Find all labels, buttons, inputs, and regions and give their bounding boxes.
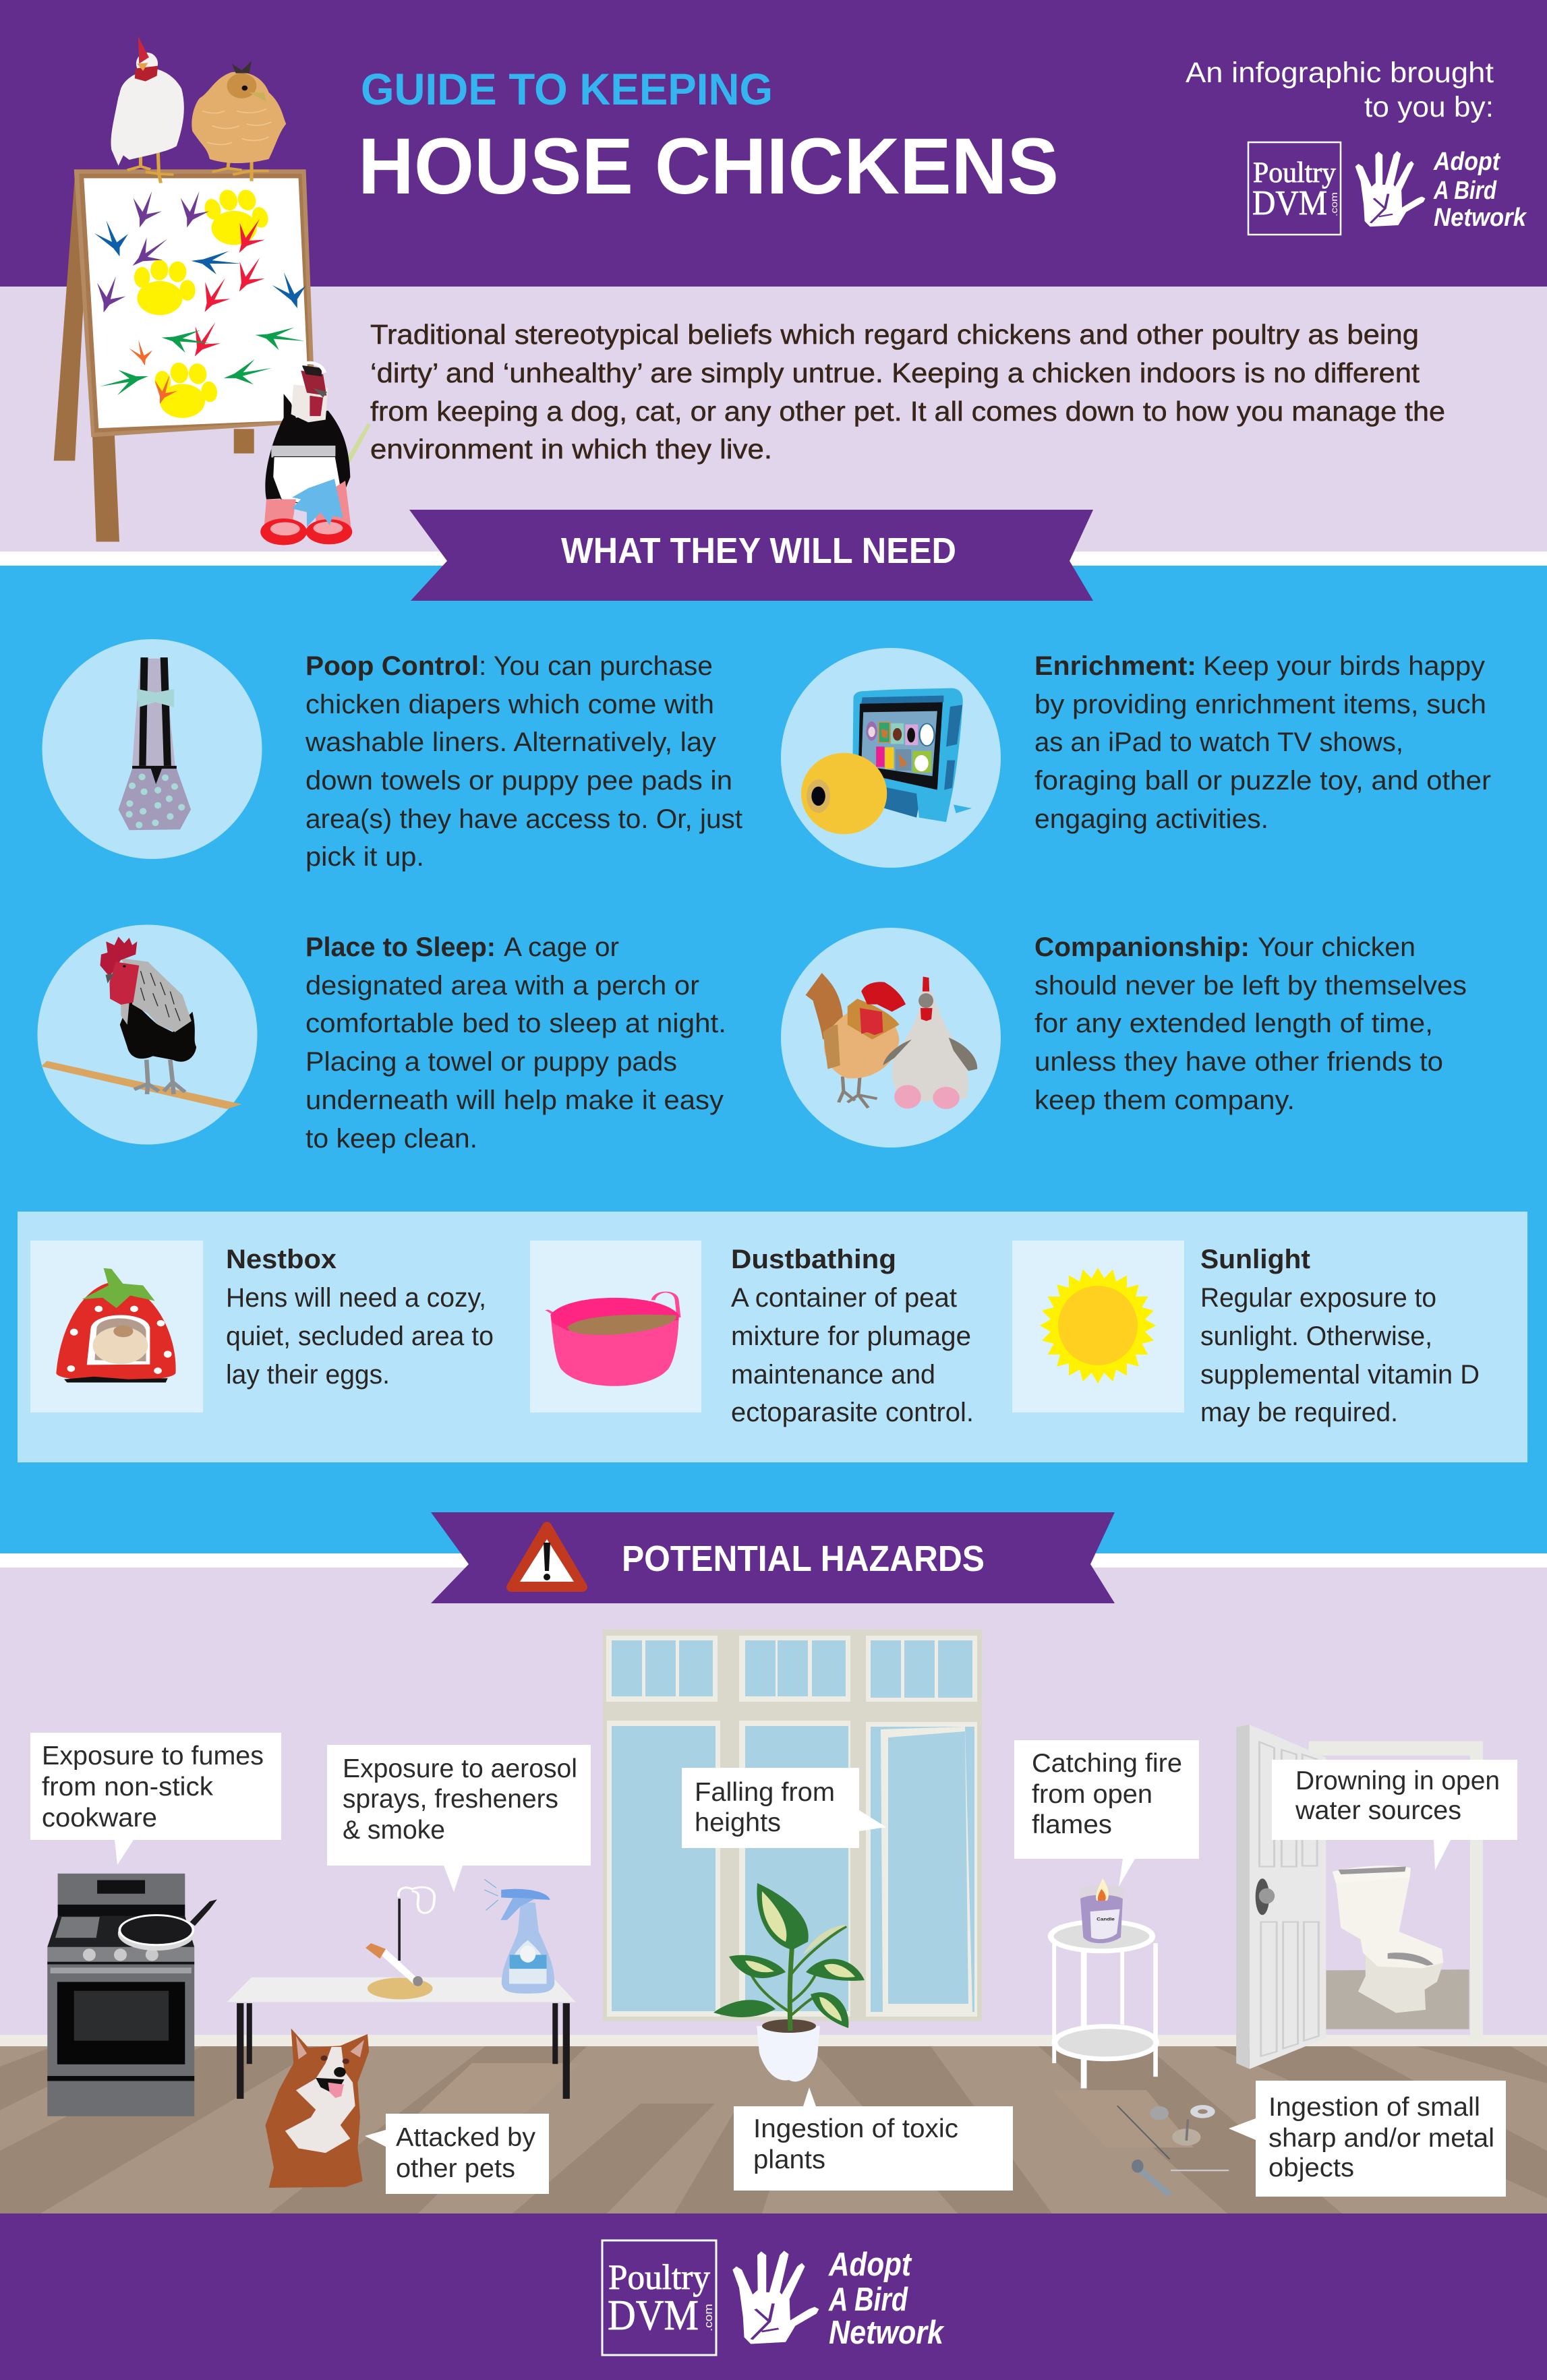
logo: Adopt A Bird Network header: Adopt — [1433, 148, 1500, 176]
logo: hand print footer — [732, 2251, 819, 2344]
text: poop control: washable liners. Alternatively, lay — [305, 727, 716, 757]
callout: toxic plants — [734, 2087, 1013, 2191]
text: poop control — [305, 651, 742, 872]
scene: table with smoke sources — [227, 1879, 576, 2099]
scene: wood floor — [0, 2046, 1547, 2213]
text: companionship: Your chicken — [1258, 932, 1415, 962]
side table — [1051, 1922, 1158, 2088]
scene: stove — [47, 1874, 217, 2116]
text: poop control: chicken diapers which come with — [305, 690, 714, 719]
icon: warning triangle — [511, 1526, 583, 1587]
callout: drowning — [1272, 1760, 1517, 1870]
callout: flames: from open — [1032, 1780, 1152, 1809]
scene: potted plant — [713, 1883, 865, 2081]
logo: Poultry DVM header: Poultry — [1253, 157, 1336, 189]
plant pot — [757, 2026, 820, 2081]
footer background — [0, 2213, 1547, 2380]
icon: strawberry nest — [30, 1241, 203, 1412]
text: dustbathing — [731, 1245, 974, 1427]
callout: pets — [365, 2114, 549, 2194]
callout: aerosol — [327, 1745, 591, 1892]
panel: companionship — [781, 928, 1467, 1148]
dustbathing item — [530, 1241, 974, 1427]
text: place to sleep: underneath will help make it easy — [305, 1085, 724, 1115]
callout: metal objects: sharp and/or metal — [1268, 2124, 1494, 2153]
text: enrichment: Enrichment: — [1034, 651, 1196, 681]
toilet — [1333, 1866, 1443, 2013]
panel: poop control — [42, 639, 742, 872]
logo: hand print header — [1355, 151, 1426, 227]
text: place to sleep: to keep clean. — [305, 1124, 477, 1154]
callout: fumes: Exposure to fumes — [42, 1742, 264, 1771]
callout: pets: Attacked by — [396, 2123, 536, 2152]
spray bottle — [484, 1879, 554, 1994]
text: enrichment: foraging ball or puzzle toy, and other — [1034, 766, 1491, 796]
text: enrichment: engaging activities. — [1034, 804, 1268, 834]
plant leaves — [713, 1883, 865, 2028]
text: sunlight — [1200, 1245, 1480, 1427]
icon: rooster on perch — [38, 925, 258, 1145]
text: enrichment: by providing enrichment items, such — [1034, 690, 1486, 719]
callout: aerosol: Exposure to aerosol — [343, 1754, 577, 1783]
candle — [1080, 1878, 1125, 1943]
text: nestbox: Nestbox — [226, 1245, 337, 1274]
panel: place to sleep — [38, 925, 726, 1154]
door leaf — [1236, 1725, 1326, 2069]
intro text: from keeping a dog, cat, or any other pet. It all comes down to how you manage the — [370, 396, 1445, 427]
logo: Poultry DVM footer — [602, 2240, 716, 2355]
callout: drowning: Drowning in open — [1295, 1766, 1500, 1795]
panel: additional needs — [18, 1212, 1527, 1462]
text: companionship — [1034, 932, 1467, 1115]
easel — [54, 169, 316, 542]
brought to you by text: An infographic brought — [1186, 57, 1494, 89]
callout: fumes — [30, 1733, 281, 1865]
title — [358, 64, 1059, 211]
text: dustbathing: A container of peat — [731, 1283, 957, 1313]
maid chicken — [260, 363, 371, 545]
text: companionship: unless they have other friends to — [1034, 1047, 1443, 1077]
banner: what they will need: WHAT THEY WILL NEED — [561, 531, 956, 571]
logo: Adopt A Bird Network footer: Network — [829, 2315, 945, 2351]
scene: window — [603, 1630, 982, 2021]
logo: Adopt A Bird Network footer: Adopt — [828, 2247, 912, 2283]
illustration: easel with chickens — [54, 36, 371, 545]
scene: baseboard — [0, 2035, 1547, 2046]
text: sunlight: sunlight. Otherwise, — [1200, 1321, 1432, 1351]
panel: enrichment — [781, 648, 1491, 868]
callout: toxic plants: plants — [753, 2145, 825, 2174]
callout: pets: other pets — [396, 2154, 515, 2183]
callout: fumes: from non-stick — [42, 1773, 214, 1802]
banner: potential hazards — [431, 1512, 1115, 1603]
icon: sun — [1012, 1241, 1184, 1412]
callout: falling: heights — [695, 1808, 781, 1837]
nestbox item — [30, 1241, 494, 1412]
text: sunlight: may be required. — [1200, 1398, 1398, 1427]
callout: fumes: cookware — [42, 1804, 157, 1833]
icon: tablet and foraging ball — [781, 648, 1001, 868]
icon: pink tub — [530, 1241, 701, 1412]
text: dustbathing: Dustbathing — [731, 1245, 896, 1274]
text: companionship: should never be left by themselves — [1034, 971, 1467, 1001]
callout: metal objects: objects — [1268, 2153, 1354, 2182]
text: poop control: area(s) they have access to. Or, just — [305, 804, 742, 834]
white stripe hazards — [0, 1553, 1547, 1568]
logo: Poultry DVM header: DVM — [1252, 184, 1327, 222]
brought to you by text: to you by: — [1364, 91, 1494, 123]
text: dustbathing: maintenance and — [731, 1360, 935, 1390]
text: place to sleep: designated area with a perch or — [305, 971, 699, 1001]
text: nestbox: quiet, secluded area to — [226, 1321, 494, 1351]
text: place to sleep — [305, 932, 726, 1154]
text: companionship: Companionship: — [1034, 932, 1250, 962]
logo: Adopt A Bird Network header: A Bird — [1433, 177, 1497, 205]
candle: Candle — [1097, 1916, 1115, 1922]
logo: Poultry DVM footer: Poultry — [608, 2258, 710, 2297]
text: dustbathing: ectoparasite control. — [731, 1398, 974, 1427]
callout: falling — [682, 1768, 886, 1848]
brought to you by text — [1186, 57, 1494, 123]
text: enrichment: Keep your birds happy — [1203, 651, 1485, 681]
callout: drowning: water sources — [1295, 1796, 1461, 1825]
fluffy buff hen — [192, 61, 286, 181]
logo: Adopt A Bird Network footer: A Bird — [828, 2282, 908, 2318]
paw and foot prints — [90, 186, 316, 419]
callout: toxic plants: Ingestion of toxic — [753, 2114, 958, 2143]
callout: falling: Falling from — [695, 1778, 835, 1807]
callout: metal objects: Ingestion of small — [1268, 2093, 1480, 2122]
hazards wall background — [0, 1568, 1547, 2035]
callout: flames — [1014, 1740, 1199, 1886]
scene: small sharp metal objects — [1117, 2105, 1229, 2195]
callout: aerosol: & smoke — [343, 1816, 445, 1845]
text: poop control: down towels or puppy pee pads in — [305, 766, 732, 796]
text: sunlight: Sunlight — [1200, 1245, 1310, 1274]
text: place to sleep: Placing a towel or puppy pads — [305, 1047, 677, 1077]
scene: open door and toilet — [1236, 1725, 1483, 2069]
text: poop control: pick it up. — [305, 842, 424, 872]
text: companionship: keep them company. — [1034, 1085, 1295, 1115]
text: place to sleep: Place to Sleep: — [305, 932, 496, 962]
logo: Poultry DVM footer: DVM — [608, 2291, 699, 2339]
subtitle: guide to keeping: GUIDE TO KEEPING — [361, 64, 773, 114]
text: sunlight: Regular exposure to — [1200, 1283, 1436, 1313]
text: enrichment: as an iPad to watch TV shows, — [1034, 727, 1403, 757]
text: companionship: for any extended length of time, — [1034, 1009, 1433, 1038]
main title: house chickens: HOUSE CHICKENS — [358, 122, 1059, 211]
needs section background — [0, 566, 1547, 1553]
callout: aerosol: sprays, fresheners — [343, 1785, 558, 1814]
icon: rooster and hen friends — [781, 928, 1001, 1148]
ashtray and cigarette — [366, 1887, 434, 1999]
logo: Poultry DVM header — [1248, 142, 1341, 235]
white rooster — [111, 36, 184, 183]
intro text: ‘dirty’ and ‘unhealthy’ are simply untrue. Keeping a chicken indoors is no different — [370, 357, 1420, 388]
header background — [0, 0, 1547, 287]
text: nestbox: lay their eggs. — [226, 1360, 390, 1390]
logo: Adopt A Bird Network header — [1433, 148, 1527, 232]
text: dustbathing: mixture for plumage — [731, 1321, 971, 1351]
banner: what they will need — [409, 510, 1093, 601]
scene: corgi — [266, 2028, 369, 2188]
logo: Poultry DVM footer: .com — [702, 2304, 715, 2331]
text: enrichment — [1034, 651, 1491, 834]
intro text — [370, 319, 1445, 465]
intro text: Traditional stereotypical beliefs which regard chickens and other poultry as being — [370, 319, 1419, 350]
text: place to sleep: A cage or — [504, 932, 619, 962]
intro text: environment in which they live. — [370, 434, 772, 465]
scene: candle table — [1051, 1878, 1158, 2088]
icon: chicken diaper — [42, 639, 262, 859]
callout: metal objects — [1229, 2081, 1506, 2197]
sunlight item — [1012, 1241, 1480, 1427]
intro background — [0, 287, 1547, 552]
text: nestbox — [226, 1245, 494, 1390]
banner: potential hazards: POTENTIAL HAZARDS — [622, 1539, 985, 1579]
text: place to sleep: comfortable bed to sleep at night. — [305, 1009, 726, 1038]
logo: Adopt A Bird Network footer — [828, 2247, 945, 2351]
text: poop control: : You can purchase — [479, 651, 713, 681]
callout: flames: Catching fire — [1032, 1749, 1182, 1778]
text: poop control: Poop Control — [305, 651, 479, 681]
logo: Poultry DVM header: .com — [1329, 192, 1339, 216]
callout: flames: flames — [1032, 1810, 1112, 1839]
text: nestbox: Hens will need a cozy, — [226, 1283, 486, 1313]
white stripe — [0, 552, 1547, 566]
text: sunlight: supplemental vitamin D — [1200, 1360, 1480, 1390]
logo: Adopt A Bird Network header: Network — [1434, 204, 1527, 232]
